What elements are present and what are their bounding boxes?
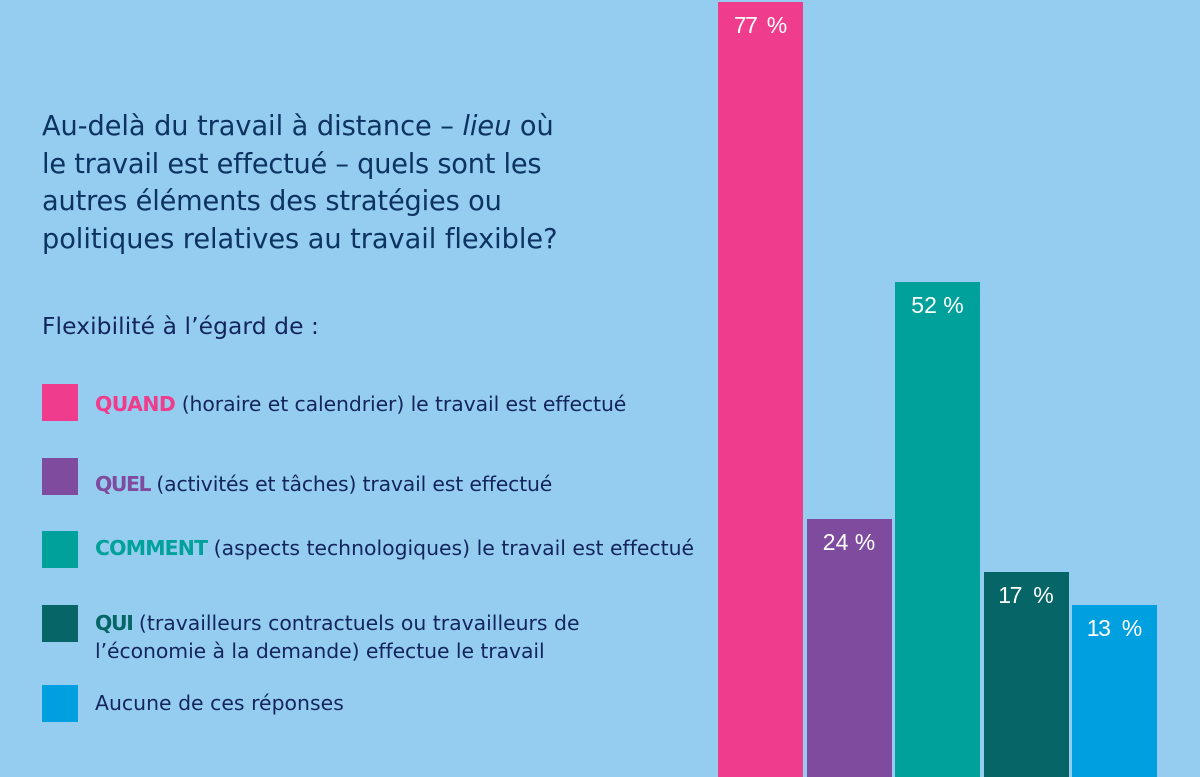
title: le travail est effectué – quels sont les [42,149,541,180]
bar chart [718,2,1157,777]
legend [42,384,694,722]
bar: comment 52 %: 52 % [911,292,964,318]
legend swatch: qui [42,605,78,642]
legend swatch: quand [42,384,78,421]
title: autres éléments des stratégies ou [42,186,502,217]
legend text: quand: QUAND (horaire et calendrier) le travail est effectué [95,392,626,416]
bar: quel 24 % [806,519,892,777]
bar: aucune 13 % [1072,605,1157,777]
title [42,111,557,255]
legend text: qui: QUI (travailleurs contractuels ou travailleurs de [95,611,580,635]
bar: aucune 13 %: 13 % [1087,615,1142,641]
legend swatch: comment [42,531,78,568]
legend text: qui [95,611,580,663]
bar: qui 17 % [984,572,1068,777]
legend heading: Flexibilité à l’égard de : [42,312,319,340]
title: politiques relatives au travail flexible? [42,224,557,255]
legend text: comment: COMMENT (aspects technologiques) le travail est effectué [95,536,694,560]
legend swatch: aucune [42,685,78,722]
legend text: qui: l’économie à la demande) effectue le travail [95,639,545,663]
legend text: quel: QUEL (activités et tâches) travail est effectué [95,472,552,496]
bar: quel 24 %: 24 % [823,529,875,555]
title: Au-delà du travail à distance – lieu où [42,111,554,142]
bar: quand 77 % [718,2,803,777]
bar: comment 52 % [895,282,980,777]
bar: quand 77 %: 77 % [734,12,787,38]
legend text: aucune: Aucune de ces réponses [95,691,344,715]
bar: qui 17 %: 17 % [998,582,1054,608]
legend swatch: quel [42,458,78,495]
